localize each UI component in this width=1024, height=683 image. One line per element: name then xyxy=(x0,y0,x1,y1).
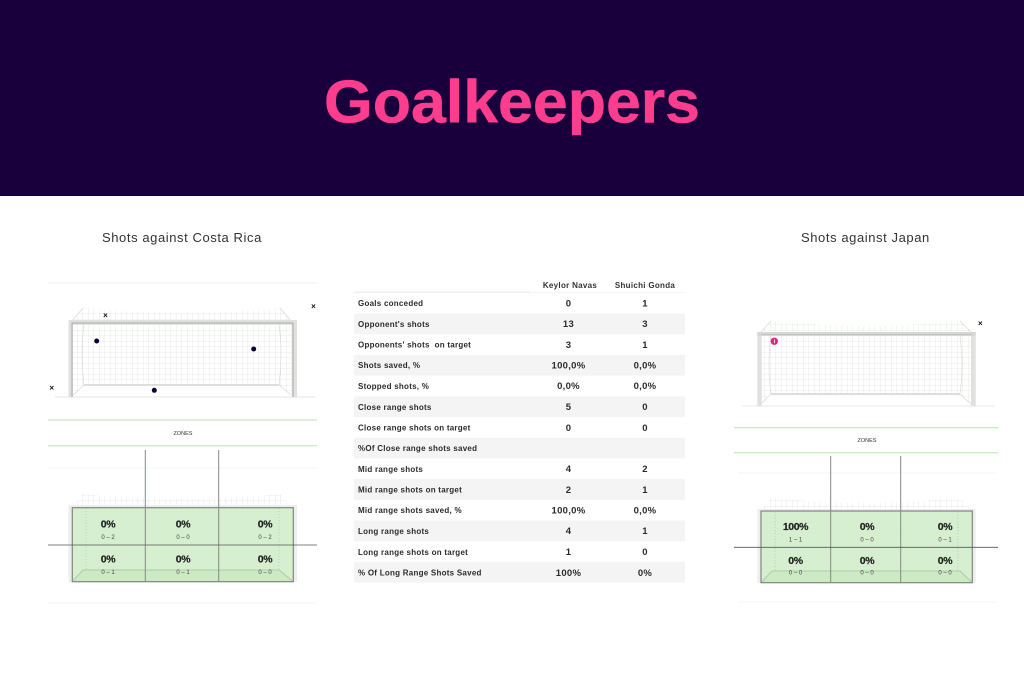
panel: shots against Costa Rica xyxy=(48,230,317,603)
table rows: Opponent's shots xyxy=(358,320,430,329)
table rows xyxy=(358,298,657,579)
table rows: 1 xyxy=(642,298,648,310)
table rows: 13 xyxy=(563,319,574,330)
table rows: 3 xyxy=(566,340,571,351)
table rows: 0 xyxy=(642,402,648,413)
panel: shots against Japan xyxy=(734,230,998,602)
table rows: 1 xyxy=(642,526,648,537)
missed shot marker: × xyxy=(978,319,983,328)
table rows: 4 xyxy=(566,526,572,537)
zone values: 0% xyxy=(788,555,804,567)
table rows: Mid range shots on target xyxy=(358,486,462,494)
table rows: Long range shots xyxy=(358,527,429,536)
table rows: 0 xyxy=(566,298,571,310)
zone values: 0 – 2 xyxy=(101,535,115,541)
zone values: 0 – 1 xyxy=(176,570,190,576)
table rows: 0 xyxy=(642,423,648,434)
table stripes xyxy=(354,314,685,583)
table rows: 0,0% xyxy=(634,506,657,516)
table rows: 100,0% xyxy=(551,506,586,516)
table rows: 0,0% xyxy=(634,381,657,392)
zone values: 1 – 1 xyxy=(789,538,803,544)
table rows: 4 xyxy=(566,464,572,475)
table rows: 2 xyxy=(642,464,648,475)
goal marker xyxy=(771,338,778,345)
heading: Costa Rica: Shots against Costa Rica xyxy=(102,230,262,245)
title: Goalkeepers xyxy=(324,68,700,136)
zone values: 0 – 1 xyxy=(101,570,115,576)
zone values: 0 – 0 xyxy=(176,535,190,541)
zone values: 0% xyxy=(176,554,191,566)
goal diagram: Japan shots xyxy=(742,319,995,406)
table rows: 0,0% xyxy=(557,381,580,392)
missed shot markers: × xyxy=(49,384,54,392)
zone values: 0 – 0 xyxy=(938,570,952,576)
zone values: 0% xyxy=(258,519,273,531)
missed shot markers: × xyxy=(311,302,316,311)
table rows: 100% xyxy=(556,568,582,579)
table rows: 1 xyxy=(642,485,648,496)
zone values: 0% xyxy=(101,554,116,566)
zones label: Costa Rica: ZONES xyxy=(174,431,193,437)
table rows: 0 xyxy=(566,423,571,434)
table rows: 0 xyxy=(642,547,648,558)
table rows: Opponents' shots on target xyxy=(358,340,471,350)
zone values: 0% xyxy=(860,555,875,567)
zone values: 0 – 0 xyxy=(789,570,803,576)
table rows: 5 xyxy=(566,402,572,413)
zone values: 0 – 0 xyxy=(258,570,272,576)
table rows: 100,0% xyxy=(551,360,586,372)
zone values: 0 – 2 xyxy=(258,535,272,541)
zone values: 0% xyxy=(176,519,191,531)
table rows: %Of Close range shots saved xyxy=(358,444,477,453)
table rows: Long range shots on target xyxy=(358,548,468,557)
table rows: Shots saved, % xyxy=(358,361,420,370)
zone values: 0% xyxy=(101,519,116,531)
table header: Shuichi Gonda xyxy=(615,281,675,290)
heading: Japan: Shots against Japan xyxy=(801,230,930,245)
zone values: 0% xyxy=(938,555,953,567)
table rows: Mid range shots xyxy=(358,465,423,474)
header banner xyxy=(0,0,1024,196)
zone values: 0 – 1 xyxy=(938,538,952,544)
shots on target markers xyxy=(94,338,256,393)
missed shot markers: × xyxy=(103,311,108,320)
zones label: Japan: ZONES xyxy=(858,438,877,444)
table rows: 0,0% xyxy=(634,360,657,372)
zone values: 0% xyxy=(860,521,875,533)
table rows: 0% xyxy=(638,568,652,579)
zone values: 0% xyxy=(258,554,273,566)
zone values: 0% xyxy=(938,521,953,533)
table rows: Stopped shots, % xyxy=(358,382,429,391)
missed shot markers xyxy=(49,302,316,392)
table header xyxy=(543,281,675,290)
zones chart: Japan xyxy=(734,456,998,602)
comparison table xyxy=(354,281,685,583)
table rows: 2 xyxy=(566,485,571,496)
table rows: % Of Long Range Shots Saved xyxy=(358,568,482,578)
zones chart: Costa Rica xyxy=(48,450,317,603)
zone values: 100% xyxy=(783,521,809,533)
goal diagram: Costa Rica shots xyxy=(48,283,317,397)
table rows: 3 xyxy=(642,319,648,330)
table rows: Close range shots on target xyxy=(358,424,471,432)
table rows: 1 xyxy=(566,547,572,558)
table header: Keylor Navas xyxy=(543,281,597,290)
zone values xyxy=(783,521,953,576)
zone values: 0 – 0 xyxy=(860,538,874,544)
zone values: 0 – 0 xyxy=(860,570,874,576)
table rows: Close range shots xyxy=(358,403,432,412)
table rows: 1 xyxy=(642,340,648,351)
table rows: Mid range shots saved, % xyxy=(358,506,462,515)
zone values xyxy=(101,519,273,576)
table rows: Goals conceded xyxy=(358,299,423,308)
